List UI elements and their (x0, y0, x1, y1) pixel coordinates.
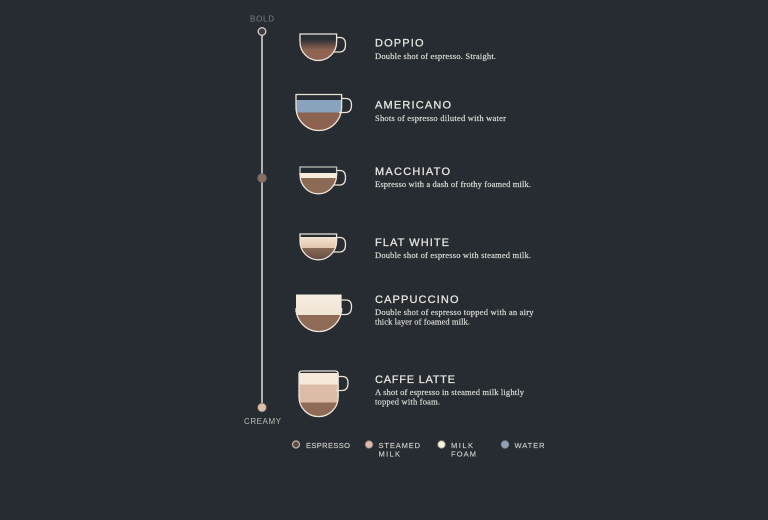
cup: americano (296, 94, 352, 132)
text: americano (375, 100, 506, 123)
text: caffe latte: topped with foam. (375, 396, 440, 406)
node: creamy (258, 403, 266, 412)
legend: steamed milk: MILK (378, 450, 400, 458)
text: caffe latte: A shot of espresso in steamed milk lightly (375, 387, 525, 397)
scale timeline (244, 14, 282, 426)
text: caffe latte: CAFFE LATTE (375, 374, 455, 386)
node: bold (258, 28, 266, 35)
text: flat white: FLAT WHITE (375, 237, 449, 249)
cup: flat white (300, 234, 346, 261)
cup: macchiato (300, 167, 346, 195)
text: caffe latte (375, 374, 525, 406)
text: doppio (375, 38, 496, 61)
text: cappuccino: thick layer of foamed milk. (375, 316, 470, 326)
text: americano: Shots of espresso diluted with water (375, 113, 506, 123)
text: doppio: DOPPIO (375, 38, 424, 50)
text: cappuccino: CAPPUCCINO (375, 294, 459, 306)
legend: espresso: ESPRESSO (306, 441, 350, 450)
legend: milk foam: MILK (451, 441, 473, 450)
legend: water: WATER (514, 441, 545, 450)
legend: steamed milk: STEAMED (378, 441, 421, 450)
cup: cappuccino (296, 294, 352, 333)
text: cappuccino (375, 294, 534, 326)
legend: steamed milk (365, 441, 421, 458)
label: creamy: CREAMY (244, 417, 282, 426)
node: middle (258, 174, 266, 182)
legend: water (501, 441, 545, 450)
text: flat white (375, 237, 531, 260)
text: macchiato (375, 166, 531, 189)
scale line (261, 32, 263, 406)
cup: doppio (300, 34, 346, 62)
text: flat white: Double shot of espresso with steamed milk. (375, 250, 531, 260)
cup: caffe latte (299, 371, 348, 418)
text: americano: AMERICANO (375, 100, 451, 112)
text: cappuccino: Double shot of espresso topped with an airy (375, 307, 534, 317)
text: macchiato: Espresso with a dash of frothy foamed milk. (375, 179, 531, 189)
legend (292, 441, 545, 458)
legend: milk foam (438, 441, 476, 458)
text: macchiato: MACCHIATO (375, 166, 450, 178)
legend: milk foam: FOAM (451, 450, 476, 458)
text: doppio: Double shot of espresso. Straight. (375, 51, 496, 61)
label: bold: BOLD (250, 14, 274, 24)
